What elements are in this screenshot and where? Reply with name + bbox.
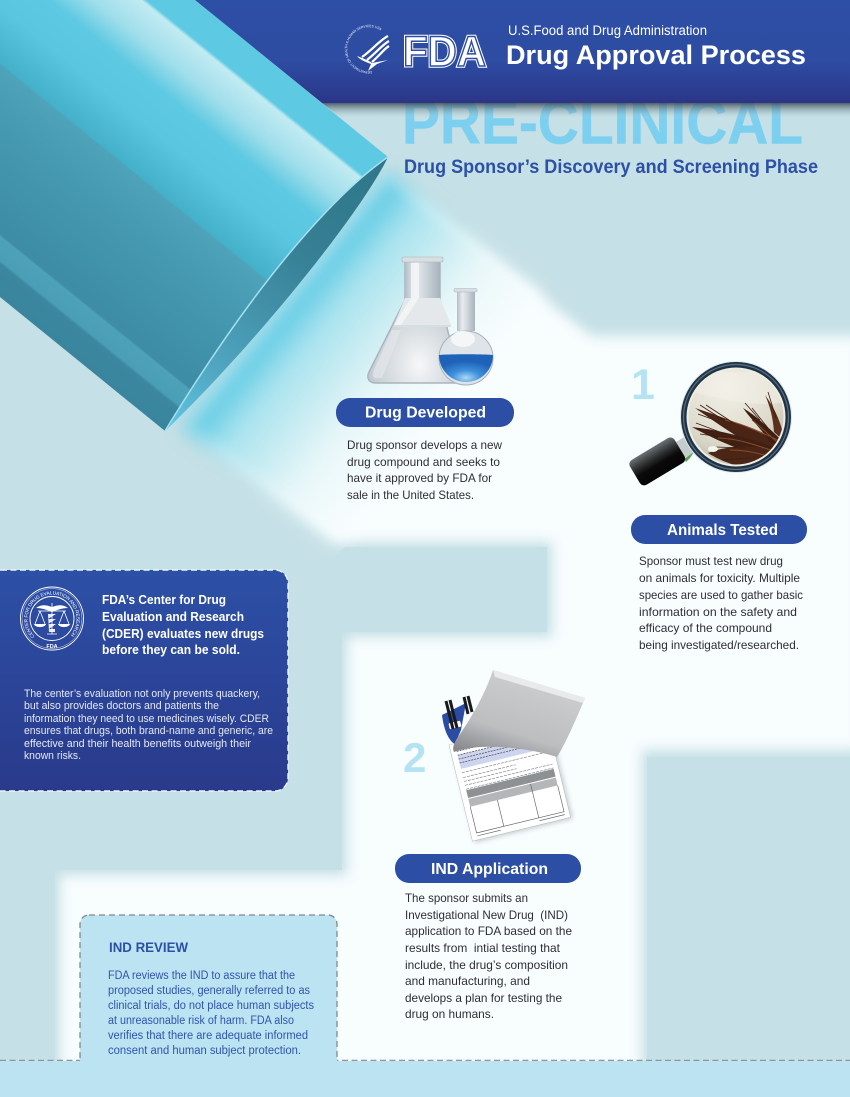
- text: IND Application description: develops a plan for testing the: [405, 991, 562, 1005]
- icon: flasks: [368, 257, 493, 385]
- text: Drug Developed description: [347, 438, 502, 502]
- icon: CDER seal: FDA: [46, 644, 58, 650]
- IND Review heading: IND REVIEW: [109, 939, 189, 955]
- CDER body text: but also provides doctors and patients the: [24, 700, 219, 712]
- agency name: U.S.Food and Drug Administration: [508, 23, 707, 38]
- CDER heading text: (CDER) evaluates new drugs: [102, 627, 264, 641]
- pill: IND Application: IND Application: [431, 861, 548, 878]
- IND Review body text: consent and human subject protection.: [108, 1045, 301, 1057]
- text: IND Application description: results from intial testing that: [405, 941, 561, 955]
- text: IND Application description: include, the drug’s composition: [405, 958, 568, 972]
- text: IND Application description: drug on humans.: [405, 1007, 494, 1021]
- text: Animals Tested description: Sponsor must test new drug: [639, 554, 783, 568]
- icon: magnifying glass with specimen: [628, 361, 792, 487]
- large PRE-CLINICAL heading: PRE-CLINICAL: [402, 88, 803, 158]
- text: Animals Tested description: [639, 554, 803, 652]
- title: Drug Approval Process: [506, 40, 806, 70]
- text: Animals Tested description: on animals for toxicity. Multiple: [639, 571, 800, 585]
- white stepped content area: [60, 178, 850, 1070]
- IND Review body text: clinical trials, do not place human subjects: [108, 1000, 314, 1012]
- text: IND Application description: The sponsor submits an: [405, 891, 528, 905]
- CDER body text: ensures that drugs, both brand-name and generic, are: [24, 725, 273, 737]
- bottom dashed line: [0, 1060, 850, 1062]
- IND Review body text: [108, 970, 314, 1057]
- text: Animals Tested description: species are used to gather basic: [639, 588, 803, 602]
- text: IND Application description: and manufacturing, and: [405, 974, 530, 988]
- text: Animals Tested description: being investigated/researched.: [639, 638, 799, 652]
- text: Drug Developed description: drug compound and seeks to: [347, 455, 500, 469]
- text: IND Application description: application to FDA based on the: [405, 924, 572, 938]
- light beam from pipe: [182, 172, 545, 545]
- IND Review body text: at unreasonable risk of harm. FDA also: [108, 1015, 294, 1027]
- CDER heading text: Evaluation and Research: [102, 610, 244, 624]
- pill: Drug Developed: Drug Developed: [365, 404, 486, 422]
- bottom band: [0, 1061, 850, 1097]
- CDER body text: effective and their health benefits outweigh their: [24, 738, 251, 750]
- CDER body text: information they need to use medicines wisely. CDER: [24, 713, 269, 725]
- text: IND Application description: Investigational New Drug (IND): [405, 908, 568, 922]
- binder clip tab: [442, 703, 466, 744]
- text: IND Application description: [405, 891, 572, 1021]
- blue background blocks: [0, 547, 850, 1061]
- text: Animals Tested description: efficacy of the compound: [639, 621, 772, 635]
- number 2: 2: [403, 734, 426, 781]
- panel: IND Review: [79, 914, 338, 1061]
- CDER heading text: [102, 593, 264, 657]
- pill: Animals Tested: [631, 515, 807, 544]
- CDER body text: known risks.: [24, 750, 81, 762]
- IND Review body text: FDA reviews the IND to assure that the: [108, 970, 295, 982]
- text: Drug Developed description: have it approved by FDA for: [347, 471, 492, 485]
- text: Animals Tested description: information on the safety and: [639, 605, 797, 619]
- form page: [449, 721, 573, 843]
- CDER heading text: before they can be sold.: [102, 643, 240, 657]
- IND Review body text: verifies that there are adequate informed: [108, 1030, 308, 1042]
- CDER heading text: FDA’s Center for Drug: [102, 593, 226, 607]
- curled page: [453, 670, 585, 757]
- pill: Animals Tested: Animals Tested: [667, 522, 778, 539]
- logo: FDA: FDA: [403, 28, 486, 76]
- text: Drug Developed description: Drug sponsor develops a new: [347, 438, 502, 452]
- text: Drug Developed description: sale in the United States.: [347, 488, 474, 502]
- icon: IND application form: [442, 670, 585, 843]
- CDER body text: [24, 688, 273, 762]
- icon: CDER seal: CENTER FOR DRUG EVALUATION AND RESEARCH: [24, 591, 80, 638]
- subtitle: Drug Sponsor’s Discovery and Screening Phase: [404, 157, 818, 178]
- icon: HHS eagle seal: DEPARTMENT OF HEALTH & HUMAN SERVICES USA: [344, 24, 382, 74]
- panel: CDER: [0, 569, 289, 792]
- number 1: 1: [631, 361, 655, 409]
- logo: FDA: FDA: [403, 28, 486, 76]
- pill: Drug Developed: [336, 398, 514, 427]
- icon: CDER seal: [20, 586, 84, 650]
- pipe: [0, 0, 388, 431]
- header banner: [195, 0, 850, 103]
- IND Review body text: proposed studies, generally referred to as: [108, 985, 310, 997]
- CDER body text: The center’s evaluation not only prevents quackery,: [24, 688, 260, 700]
- pill: IND Application: [395, 854, 581, 883]
- header shadow: [322, 103, 850, 119]
